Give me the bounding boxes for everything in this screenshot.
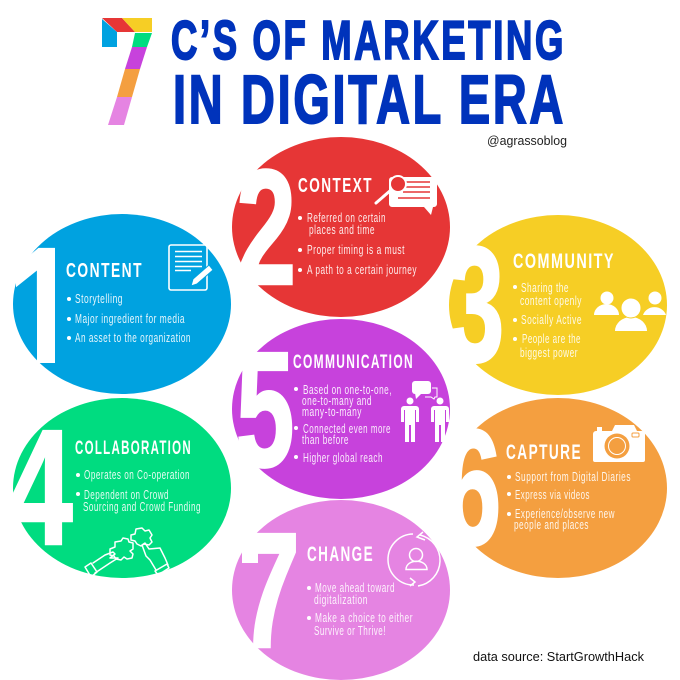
bullet list: [76, 467, 201, 514]
bullet list: Make a choice to either: [315, 610, 413, 625]
bullet list: Based on one-to-one,: [303, 382, 392, 397]
heading: CAPTURE: [506, 441, 582, 464]
bullet list: Connected even more: [303, 421, 391, 436]
bullet list: Storytelling: [75, 291, 123, 306]
icon: person in cycle arrows: [388, 532, 440, 586]
panel: 6 capture: [443, 396, 667, 580]
heading: CHANGE: [307, 543, 374, 566]
heading: CONTEXT: [298, 174, 373, 197]
bullet list: Higher global reach: [303, 450, 383, 465]
panel: 7 change: [232, 498, 450, 680]
heading: COLLABORATION: [75, 437, 192, 459]
icon: two people talking: [401, 381, 449, 442]
bullet list: Move ahead toward: [315, 580, 395, 595]
numeral 4: 4: [7, 397, 73, 580]
numeral 2: 2: [236, 136, 296, 319]
numeral 3: 3: [446, 213, 504, 397]
bullet list: Referred on certain: [307, 210, 386, 225]
numeral 6: 6: [443, 396, 501, 580]
bullet list: [67, 291, 191, 345]
bullet list: [298, 210, 417, 277]
bullet list: Sourcing and Crowd Funding: [83, 499, 201, 514]
panel: 4 collaboration: [7, 397, 231, 580]
bullet list: Major ingredient for media: [75, 311, 185, 326]
bullet list: People are the: [522, 331, 581, 346]
panel: 2 context: [232, 136, 450, 319]
bullet list: Socially Active: [521, 312, 582, 327]
bullet list: [307, 580, 413, 638]
icon: hands with puzzle pieces: [85, 528, 169, 577]
icon: magnifier over speech bubble: [376, 176, 437, 215]
panel: 1 content: [8, 214, 231, 398]
heading: COMMUNICATION: [293, 351, 414, 373]
panel: 5 communication: [232, 318, 450, 502]
icon: three people: [594, 292, 666, 331]
bullet list: Express via videos: [515, 487, 590, 502]
bullet list: Sharing the: [521, 280, 569, 295]
bullet list: one-to-many and: [302, 393, 372, 408]
bullet list: places and time: [309, 222, 375, 237]
bullet list: Operates on Co-operation: [84, 467, 190, 482]
bullet list: A path to a certain journey: [307, 262, 417, 277]
numeral 1: 1: [8, 215, 79, 398]
bullet list: people and places: [514, 517, 589, 532]
bullet list: [294, 382, 392, 465]
bullet list: Dependent on Crowd: [84, 487, 169, 502]
numeral 7: 7: [238, 498, 300, 680]
panel: 3 community: [446, 213, 667, 397]
bullet list: Experience/observe new: [515, 506, 615, 521]
numeral 5: 5: [236, 318, 294, 502]
bullet list: biggest power: [520, 345, 578, 360]
bullet list: many-to-many: [302, 404, 362, 419]
bullet list: [513, 280, 582, 360]
bullet list: Proper timing is a must: [307, 242, 405, 257]
bullet list: An asset to the organization: [75, 330, 191, 345]
bullet list: [507, 469, 631, 532]
icon: camera: [593, 425, 645, 462]
icon: multicolour number seven: [102, 18, 152, 125]
title: [102, 9, 566, 138]
bullet list: Survive or Thrive!: [314, 623, 386, 638]
icon: document and pencil: [169, 245, 213, 290]
bullet list: than before: [302, 432, 349, 447]
bullet list: content openly: [520, 293, 582, 308]
heading: CONTENT: [66, 259, 143, 282]
handle: @agrassoblog: [487, 134, 567, 148]
data source credit: data source: StartGrowthHack: [473, 649, 644, 664]
heading: COMMUNITY: [513, 249, 615, 273]
bullet list: digitalization: [314, 592, 368, 607]
